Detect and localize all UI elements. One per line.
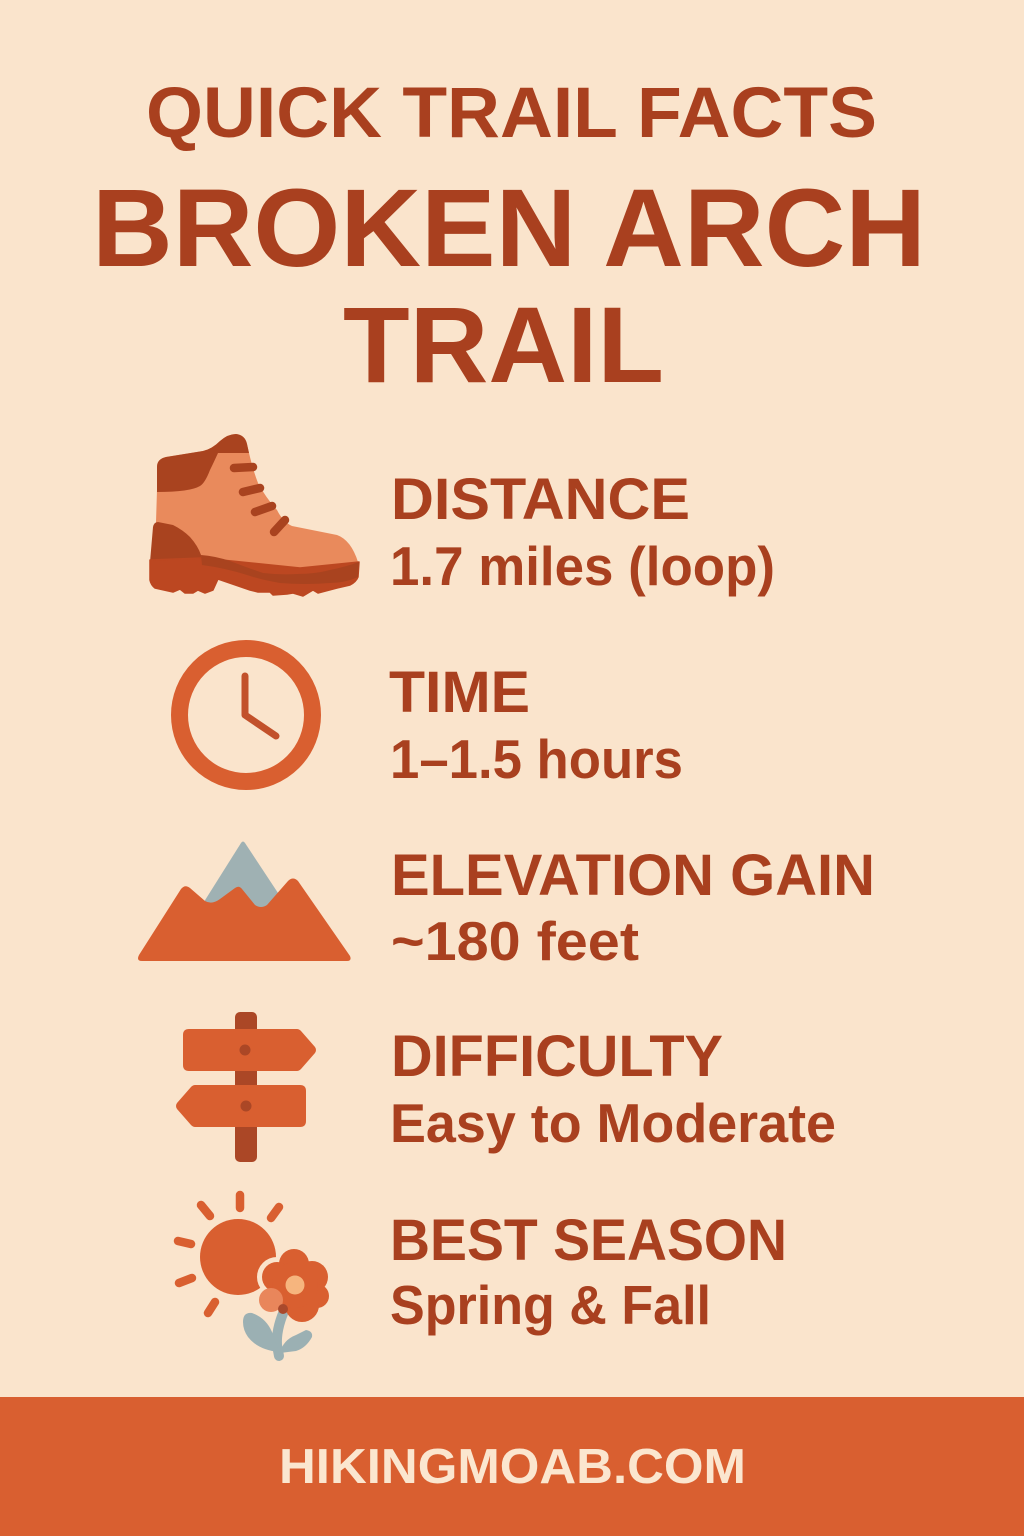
upper sign (183, 1029, 316, 1071)
front ridge (138, 878, 351, 961)
fact: best season: BEST SEASON (390, 1208, 787, 1273)
trail name line 2: TRAIL (343, 284, 664, 405)
sun disc (200, 1219, 276, 1295)
stem and leaves (243, 1311, 312, 1356)
fact: time: TIME (389, 660, 530, 725)
boot upper (152, 434, 359, 572)
fact: best season: Spring & Fall (390, 1274, 711, 1336)
flower halo (257, 1257, 319, 1316)
fact: elevation gain (391, 843, 875, 972)
eyebrow heading: QUICK TRAIL FACTS (146, 74, 877, 153)
fact: difficulty: Easy to Moderate (390, 1092, 836, 1154)
fact: distance: 1.7 miles (loop) (390, 535, 775, 597)
stem knot (278, 1304, 288, 1314)
icon: hiking boot (150, 434, 359, 596)
icon: sun and flower (178, 1195, 329, 1356)
boot heel (150, 522, 204, 567)
flower centre (286, 1276, 304, 1294)
boot collar (157, 434, 249, 492)
boot sole (150, 558, 359, 596)
sun rays (178, 1195, 279, 1313)
sole band (201, 555, 359, 584)
fact: distance: DISTANCE (391, 467, 690, 532)
icon: clock (180, 648, 312, 782)
footer website: HIKINGMOAB.COM (279, 1440, 746, 1494)
overlap petal (259, 1288, 283, 1312)
lower sign (176, 1085, 306, 1127)
fact: difficulty (390, 1024, 836, 1154)
boot laces (234, 467, 285, 532)
fact: elevation gain: ~180 feet (391, 910, 639, 972)
icon: mountain (138, 842, 351, 961)
fact: time: 1–1.5 hours (390, 728, 683, 790)
fact: distance (390, 467, 775, 597)
trail name line 1: BROKEN ARCH (92, 167, 926, 290)
flower petals (262, 1249, 329, 1322)
title (92, 74, 926, 405)
fact: difficulty: DIFFICULTY (391, 1024, 723, 1089)
fact: elevation gain: ELEVATION GAIN (391, 843, 875, 908)
fact: best season (390, 1208, 787, 1336)
icon: signpost (176, 1012, 316, 1162)
fact: time (389, 660, 683, 790)
snow peak (202, 842, 280, 915)
post (235, 1012, 257, 1162)
footer band (0, 1397, 1024, 1536)
